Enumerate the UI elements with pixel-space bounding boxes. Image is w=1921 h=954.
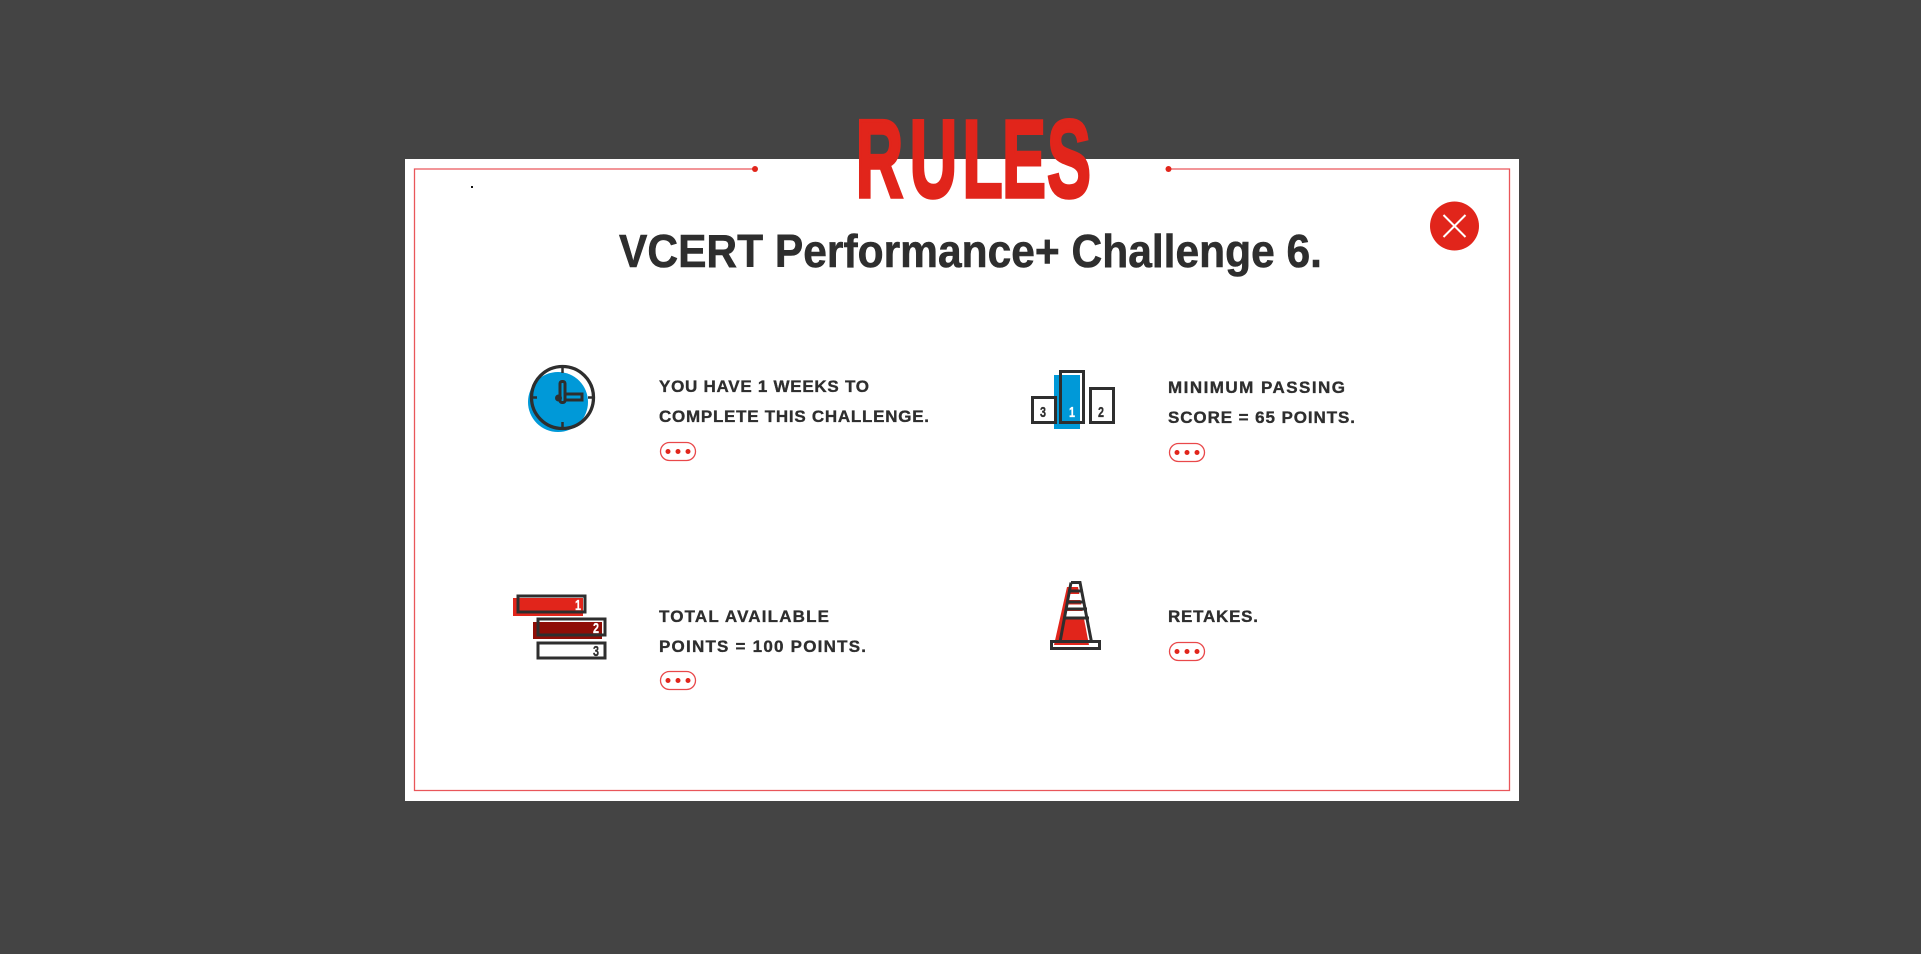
more button [1170, 642, 1204, 660]
icon: podium [1032, 372, 1114, 429]
heading: challenge name: VCERT Performance+ Challenge 6. [619, 225, 1322, 277]
text: total points: POINTS = 100 POINTS. [659, 637, 866, 656]
text: total points: TOTAL AVAILABLE [659, 607, 829, 626]
text: total points [659, 607, 866, 656]
stray black dot [471, 186, 473, 188]
rule: time limit [528, 366, 929, 460]
text: time limit: YOU HAVE 1 WEEKS TO [659, 377, 869, 396]
text: passing score [1168, 378, 1355, 427]
icon: podium: 1 [1069, 404, 1075, 421]
panel border with end dots [414, 166, 1510, 790]
text: passing score: SCORE = 65 POINTS. [1168, 408, 1355, 427]
text: passing score: MINIMUM PASSING [1168, 378, 1345, 397]
text: retakes: RETAKES. [1168, 607, 1258, 626]
icon: traffic cone [1052, 582, 1100, 648]
icon: clock [528, 366, 594, 432]
icon: ranked bars: 1 [575, 597, 581, 614]
icon: podium: 3 [1040, 404, 1046, 421]
more button [1170, 444, 1204, 462]
title: RULES: RULES [856, 99, 1091, 221]
text: time limit: COMPLETE THIS CHALLENGE. [659, 407, 929, 426]
rule: retakes [1052, 582, 1258, 660]
text: time limit [659, 377, 929, 426]
icon: ranked bars: 3 [593, 643, 599, 660]
close button [1430, 202, 1479, 250]
icon: podium: 2 [1098, 404, 1104, 421]
icon: ranked bars: 2 [593, 620, 599, 637]
rule: passing score [1032, 372, 1355, 462]
panel: white modal [405, 159, 1519, 801]
more button [660, 672, 696, 690]
icon: ranked bars [513, 596, 605, 660]
rule: total points [513, 596, 866, 690]
more button [660, 442, 696, 460]
